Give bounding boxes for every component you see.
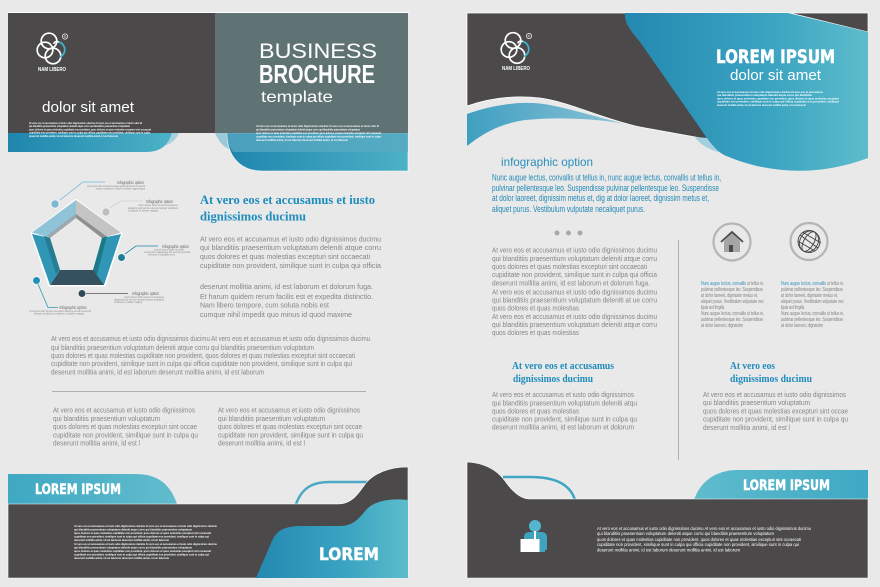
callout: top left option: Lorem ipsum dolor sit amet consectetur adipiscing elit sed do eiusmod — [87, 185, 146, 188]
footer tab title right: LOREM IPSUM — [743, 478, 830, 494]
heading: infographic option: infographic option — [501, 155, 593, 169]
text: left house column: Nunc augue lectus, convallis ut tellus in, — [701, 281, 764, 287]
text: right globe column: aliquet purus. Vestibulum vulputate nec — [781, 299, 844, 305]
banner small text left: deserunt mollitia animi, id est laborum deserunt mollitia animi, id est laborum — [29, 134, 118, 138]
blue paragraph: pulvinar pellentesque leo. Suspendisse pulvinar pellentesque leo. Suspendisse — [492, 183, 719, 193]
cover title: BUSINESS — [259, 40, 377, 63]
text block: left column: quos dolores et quas molestias excepturi sint occae — [53, 422, 197, 431]
blue paragraph: aliquet purus. Vestibulum vulputate necaliquet purus. — [492, 204, 645, 214]
callout: right option — [118, 244, 191, 261]
text block: left article: cupiditate non provident, similique sunt in culpa qui officia — [200, 261, 382, 270]
text block: right page lower left: qui blanditiis praesentium voluptatum deleniti atqu — [492, 398, 637, 408]
banner small text left: cupiditate non provident, similique sunt in culpa qui officia cupiditate non provident, similique sunt in culpa — [29, 130, 150, 134]
text block: left article: At vero eos et accusamus et iusto odio dignissimos ducimu — [200, 234, 381, 244]
text block: right page main: At vero eos et accusamus et iusto odio dignissimos ducimu — [492, 246, 657, 254]
footer small text right: cupiditate non provident, similique sunt in culpa qui officia cupiditate non provident, similique sunt in culpa qui — [597, 542, 799, 547]
banner small text left — [29, 121, 151, 138]
banner small text right — [256, 124, 381, 142]
icon: globe — [790, 223, 828, 260]
banner small text right: cupiditate non provident, similique sunt in culpa qui officia cupiditate non provident, similique sunt in culpa — [256, 134, 381, 138]
text block: wide paragraph: quos dolores et quas molestias cupiditate non provident, quos dolores et quas molestias excepturi sint occaecati — [51, 351, 355, 360]
text block: right page main: quos dolores et quas molestias — [492, 328, 579, 337]
text: left house column: aliquet purus. Vestibulum vulputate nec — [701, 299, 764, 305]
text block: right page lower right: At vero eos et accusamus et iusto odio dignissimos — [703, 390, 846, 399]
footer small text left: quos dolores et quas molestias cupiditate non provident, quos dolores et quas molestias excepturi sint occaecati — [74, 549, 211, 553]
text block: right page lower right — [703, 390, 848, 432]
text block: right page lower right: quos dolores et quas molestias excepturi sint occae — [703, 406, 848, 416]
text block: left article: qui blanditiis praesentium voluptatum deleniti atque corru — [200, 243, 381, 252]
text block: right page main: qui blanditiis praesentium voluptatum deleniti atque corru — [492, 254, 657, 263]
cover title: template — [261, 89, 333, 106]
text: left house column: Nunc augue lectus, convallis ut tellus in, — [701, 311, 764, 317]
text: right globe column — [781, 281, 844, 329]
text block: wide paragraph: qui blanditiis praesentium voluptatum deleniti atque corru qui blanditiis praesentium voluptatum — [51, 343, 314, 352]
text block: right page main: At vero eos et accusamus et iusto odio dignissimos ducimu — [492, 312, 657, 321]
logo: right: ® — [528, 34, 531, 38]
right page footer — [467, 462, 868, 578]
text: left house column: pulvinar pellentesque leo. Suspendisse — [701, 317, 763, 323]
dark band — [8, 467, 408, 578]
text block: right page main: cupiditate non provident, similique sunt in culpa qui officia — [492, 270, 658, 279]
footer small text left — [74, 524, 217, 560]
callout: top left option: tempor incididunt ut labore et dolore magna aliqua — [96, 188, 146, 190]
segment: top right — [76, 200, 121, 238]
text block: wide paragraph — [51, 334, 370, 376]
text: left house column: at dolor laoreet, dignissim metus et, — [701, 293, 758, 299]
logo: left — [37, 33, 68, 73]
blue curved panel — [625, 13, 868, 171]
text block: left article: quos dolores et quas molestias excepturi sint occaecati — [200, 252, 370, 261]
footer small text right: qui blanditiis praesentium voluptatum deleniti atque corru qui blanditiis praesentium voluptatum — [597, 531, 774, 536]
callout: bottom option: ut labore et dolore magna — [114, 301, 143, 304]
text block: wide paragraph: cupiditate non provident, similique sunt in culpa qui officia cupiditate non provident, similique sunt in culpa qui — [51, 359, 352, 368]
callout: top right option: adipiscing elit sed do eiusmod tempor incididunt — [128, 207, 178, 210]
right page header — [467, 13, 868, 171]
footer small text right: quos dolores et quas molestias cupiditate non provident, quos dolores et quas molestias excepturi sint occaecati — [597, 537, 801, 542]
text block: left article: Nam libero tempore, cum soluta nobis est — [200, 300, 329, 310]
text block: right page main: deserunt mollitia animi, id est laborum et dolorum fuga. — [492, 278, 650, 288]
banner small text left: At vero eos et accusamus et iusto odio dignissimos ducimu At vero eos et accusamus et iusto odio di — [29, 121, 142, 125]
left page footer — [8, 467, 408, 578]
banner small text right: quos dolores et quas molestias cupiditate non provident, quos dolores et quas molestias excepturi sint occaecati — [256, 131, 381, 135]
teal tab — [8, 474, 177, 504]
text block: right page lower left: cupiditate non provident, similique sunt in culpa qu — [492, 414, 637, 424]
heading: right page lower right — [730, 361, 812, 385]
segment: top left — [32, 200, 76, 238]
text block: right column: deserunt mollitia animi, id est l — [218, 438, 305, 448]
text block: wide paragraph: At vero eos et accusamus et iusto odio dignissimos ducimu At vero eos et accusamus et iusto odio dignissimos ducimu — [51, 334, 370, 343]
text: right globe column: Nunc augue lectus, convallis ut tellus in, — [781, 311, 844, 317]
text: left house column — [701, 281, 764, 329]
text block: left column: qui blanditiis praesentium voluptatum — [53, 414, 160, 423]
logo: left: ® — [64, 35, 67, 39]
pale wedge — [695, 137, 722, 153]
text block: left column — [53, 406, 198, 448]
segment: left — [32, 234, 60, 285]
text block: left column: cupiditate non provident, similique sunt in culpa qu — [53, 430, 198, 440]
blue paragraph — [492, 172, 721, 214]
text block: right page main: qui blanditiis praesentium voluptatum deleniti at ue corru — [492, 296, 657, 304]
callout: bottom option — [78, 290, 164, 304]
dark band — [467, 462, 868, 578]
icon: person with laptop — [520, 520, 547, 552]
callout: bottom left option: tempor incididunt ut labore et dolore magna — [34, 312, 85, 316]
callout: right option: Lorem ipsum dolor sit amet — [154, 248, 184, 252]
teal tab — [694, 470, 868, 500]
header small text right: At vero eos et accusamus et iusto odio dignissimos ducimu At vero eos et accusamus — [717, 90, 823, 94]
footer small text right — [597, 526, 811, 552]
text: right globe column: ligula sed fringilla. — [781, 305, 805, 311]
footer small text left: At vero eos et accusamus et iusto odio dignissimos ducimu At vero eos et accusamus et iusto odio dignissimos ducimu — [74, 542, 217, 546]
heading: right page lower left: dignissimos ducimu — [513, 374, 593, 385]
logo: left: NAM LIBERO — [38, 67, 67, 73]
text block: left article — [200, 234, 382, 319]
heading: left article: dignissimos ducimu — [200, 208, 306, 224]
callout: top left option: Infographic option — [117, 180, 145, 185]
footer small text left: cupiditate non provident, similique sunt in culpa qui officia cupiditate non provident, similique sunt in culpa qui — [74, 534, 209, 538]
text block: left column: deserunt mollitia animi, id est l — [53, 438, 140, 448]
heading: left article: At vero eos et accusamus et iusto — [200, 192, 375, 207]
footer small text left: deserunt mollitia animi, id est laborum deserunt mollitia animi, id est laborum — [74, 538, 169, 542]
callout: top right option: Infographic option — [146, 199, 174, 204]
text block: right page main: At vero eos et accusamus et iusto odio dignissimos ducimu — [492, 288, 657, 296]
text block: left article: cumque nihil impedit quo minus id quod maxime — [200, 310, 352, 319]
callout: top right option: Lorem ipsum dolor sit amet consectetur — [138, 204, 178, 207]
callout: top right option — [102, 199, 178, 216]
left page top banner — [8, 12, 409, 171]
footer tab title left: LOREM IPSUM — [35, 482, 121, 498]
blue paragraph: at dolor laoreet, dignissim metus et, dig at dolor laoreet, dignissim metus et, — [492, 193, 709, 203]
segment: bottom — [50, 270, 104, 285]
callout: bottom option: Infographic option — [132, 291, 160, 296]
text block: right page lower left: deserunt mollitia animi, id est laborum et dolorum — [492, 422, 634, 432]
callout: bottom left option: Infographic option — [60, 305, 87, 310]
text block: right page lower left: At vero eos et accusamus et iusto odio dignissimos — [492, 390, 634, 399]
footer small text right: At vero eos et accusamus et iusto odio dignissimos ducimu At vero eos et accusamus et iusto odio dignissimos ducimu — [597, 526, 811, 531]
icon: house — [714, 224, 750, 260]
footer small text left: qui blanditiis praesentium voluptatum deleniti atque corru qui blanditiis praesentium voluptatum — [74, 528, 192, 532]
text block: right column: cupiditate non provident, similique sunt in culpa qu — [218, 430, 363, 440]
banner small text right: At vero eos et accusamus et iusto odio dignissimos ducimu At vero eos et accusamus et iusto odio di — [256, 124, 379, 128]
text block: left article: deserunt mollitia animi, id est laborum et dolorum fuga. — [200, 282, 373, 291]
text: left house column: pulvinar pellentesque leo. Suspendisse — [701, 287, 763, 293]
callout: right option: consectetur adipiscing elit sed do eiusmod — [144, 251, 191, 254]
cover title: BROCHURE — [259, 59, 375, 89]
callout: right option: Infographic option — [162, 244, 190, 249]
text block: right column: quos dolores et quas molestias excepturi sint occae — [218, 422, 362, 431]
text block: right page main — [492, 246, 658, 337]
pagination dots — [554, 230, 582, 236]
footer small text right: deserunt mollitia animi, id est laborum deserunt mollitia animi, id est laborum — [597, 548, 740, 552]
text: right globe column: at dolor laoreet, dignissim — [781, 323, 823, 329]
heading: right page lower right: dignissimos ducimu — [730, 374, 812, 385]
header title right: LOREM IPSUM — [716, 46, 835, 68]
heading: left article — [200, 192, 375, 224]
header subtitle right: dolor sit amet — [730, 67, 822, 84]
text block: right page lower left — [492, 390, 637, 432]
heading: right page lower left: At vero eos et accusamus — [512, 361, 614, 372]
text block: right page main: qui blanditiis praesentium voluptatum deleniti atque corru — [492, 320, 657, 329]
header small text right: cupiditate non provident, similique sunt in culpa qui officia cupiditate non provident, similique — [717, 100, 839, 104]
banner small text right: deserunt mollitia animi, id est laborum deserunt mollitia animi, id est laborum — [256, 138, 348, 142]
banner small text left: qui blanditiis praesentium voluptatum deleniti atque corru qui blanditiis praesentium voluptatum — [29, 124, 130, 128]
text: left house column: ligula sed fringilla. — [701, 305, 725, 311]
lower swoosh — [467, 103, 624, 146]
heading: right page lower right: At vero eos — [730, 361, 775, 372]
text block: right page main: quos dolores et quas molestias — [492, 304, 579, 312]
subtitle: dolor sit amet: dolor sit amet — [42, 99, 135, 116]
header small text right: deserunt mollitia animi, id est laborum deserunt mollitia animi, id est laborum — [717, 103, 806, 107]
heading: right page lower left — [512, 361, 614, 385]
text block: left column: At vero eos et accusamus et iusto odio dignissimos — [53, 406, 195, 414]
text block: right column: At vero eos et accusamus et iusto odio dignissimos — [218, 406, 360, 414]
segment: right — [93, 234, 121, 285]
callout: bottom left option: Lorem ipsum dolor sit amet consectetur adipiscing elit sed do eiusmod — [29, 310, 92, 313]
footer small text left: At vero eos et accusamus et iusto odio dignissimos ducimu At vero eos et accusamus et iusto odio dignissimos ducimu — [74, 524, 217, 528]
text block: right page main: quos dolores et quas molestias excepturi sint occaecati — [492, 262, 647, 271]
callout: top left option — [51, 180, 146, 208]
text block: right page lower left: quos dolores et quas molestias — [492, 406, 579, 416]
footer small text left: cupiditate non provident, similique sunt in culpa qui officia cupiditate non provident, similique sunt in culpa qui — [74, 552, 209, 556]
callout: top right option: ut labore et dolore magna — [128, 210, 159, 212]
text block: right page lower right: cupiditate non provident, similique sunt in culpa qu — [703, 414, 848, 424]
footer small text left: quos dolores et quas molestias cupiditate non provident, quos dolores et quas molestias excepturi sint occaecati — [74, 531, 211, 535]
banner small text right: qui blanditiis praesentium voluptatum deleniti atque corru qui blanditiis praesentium voluptatum — [256, 127, 360, 131]
text: left house column: at dolor laoreet, dignissim — [701, 323, 743, 329]
logo: right: NAM LIBERO — [502, 66, 531, 72]
callout: bottom left option — [29, 277, 92, 316]
cover title — [259, 40, 377, 106]
logo: right — [501, 33, 532, 72]
header small text right — [717, 90, 839, 107]
text: right globe column: at dolor laoreet, dignissim metus et, — [781, 293, 838, 299]
text: right globe column: pulvinar pellentesque leo. Suspendisse — [781, 317, 843, 323]
callout: bottom option: adipiscing elit sed do eiusmod tempor incididunt — [114, 298, 164, 302]
text: right globe column: pulvinar pellentesque leo. Suspendisse — [781, 287, 843, 293]
callout: right option: tempor incididunt ut — [148, 254, 175, 256]
callout: bottom option: Lorem ipsum dolor sit amet consectetur — [124, 296, 164, 299]
header small text right: quos dolores et quas molestias cupiditate non provident, quos dolores et quas molestias excepturi — [717, 96, 839, 100]
blue shape — [256, 499, 408, 578]
text block: right column — [218, 406, 363, 448]
footer small text left: deserunt mollitia animi, id est laborum deserunt mollitia animi, id est laborum — [74, 556, 169, 560]
footer word: LOREM: LOREM — [319, 545, 379, 565]
text: right globe column: Nunc augue lectus, convallis ut tellus in, — [781, 281, 844, 287]
text block: wide paragraph: deserunt mollitia animi, id est laborum deserunt mollitia animi, id est laborum — [51, 368, 264, 376]
text block: right page lower right: deserunt mollitia animi, id est l — [703, 423, 790, 432]
header small text right: qui blanditiis praesentium voluptatum deleniti atque corru qui blanditiis — [717, 93, 812, 97]
banner small text left: quos dolores et quas molestias cupiditate non provident, quos dolores et quas molestias excepturi sint occaecati — [29, 127, 151, 131]
text block: right column: qui blanditiis praesentium voluptatum — [218, 414, 325, 423]
footer small text left: qui blanditiis praesentium voluptatum deleniti atque corru qui blanditiis praesentium voluptatum — [74, 546, 192, 550]
text block: left article: Et harum quidem rerum facilis est et expedita distinctio. — [200, 292, 373, 301]
text block: right page lower right: qui blanditiis praesentium voluptatum — [703, 398, 810, 407]
pentagon infographic — [30, 198, 122, 286]
blue paragraph: Nunc augue lectus, convallis ut tellus in, nunc augue lectus, convallis ut tellus in, — [492, 172, 721, 182]
